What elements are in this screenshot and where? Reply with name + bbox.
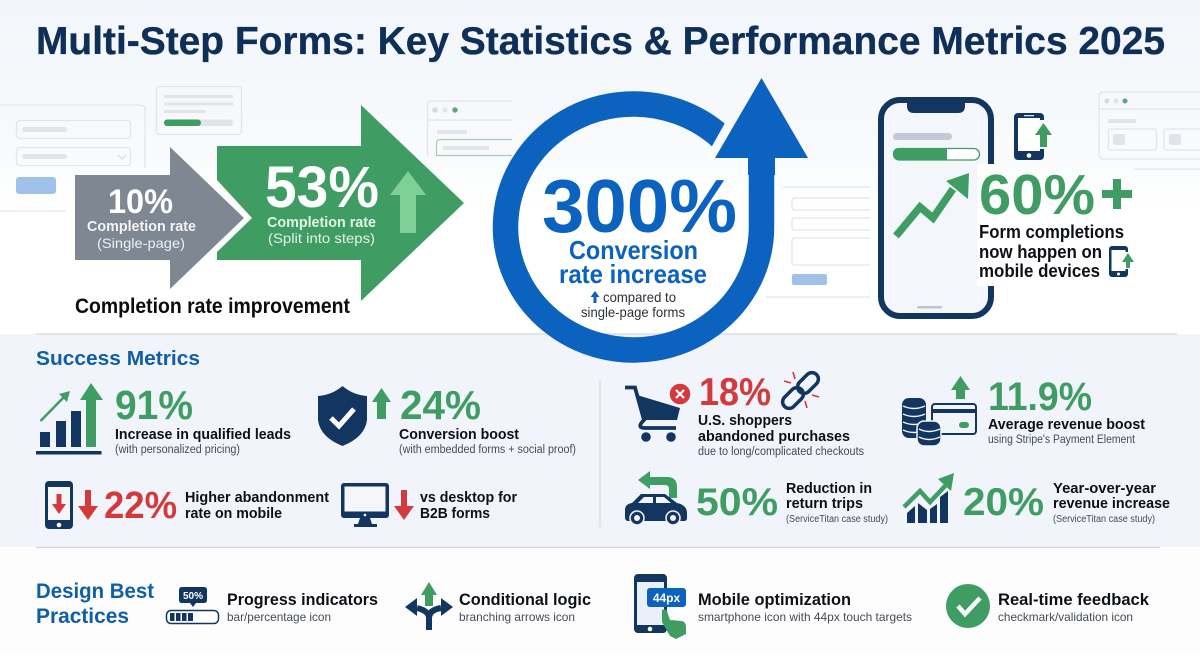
ring arrow: 300% conversion xyxy=(506,78,808,350)
metric: 22% mobile abandonment: rate on mobile xyxy=(185,505,282,522)
ghost window: middle xyxy=(428,101,512,156)
metric: 50% return trips xyxy=(625,471,888,525)
caption: completion rate improvement: Completion rate improvement xyxy=(75,295,350,318)
metric: 50% return trips: (ServiceTitan case study) xyxy=(786,514,888,525)
arrow: 10% single-page: (Single-page) xyxy=(97,235,185,251)
metric: 20% revenue increase: 20% xyxy=(963,481,1044,524)
arrow: 10% single-page: 10% xyxy=(108,183,173,221)
metric: 18% abandoned purchases: due to long/complicated checkouts xyxy=(698,446,864,458)
metric: 18% abandoned purchases: abandoned purchases xyxy=(698,428,850,445)
arrow: 53% split into steps: (Split into steps) xyxy=(268,230,375,246)
metric: 11.9% revenue boost xyxy=(902,375,1145,446)
ghost card: progress xyxy=(156,86,242,134)
practice: progress indicators: bar/percentage icon xyxy=(227,610,331,624)
stat: 60%+ mobile: now happen on xyxy=(979,242,1102,262)
metric: 20% revenue increase: Year-over-year xyxy=(1053,480,1156,497)
practice: conditional logic: branching arrows icon xyxy=(459,610,575,624)
stat: 60%+ mobile: 60% xyxy=(979,163,1095,227)
title: Multi-Step Forms: Key Statistics & Performance Metrics 2025 xyxy=(36,20,1165,63)
metric: 24% conversion boost xyxy=(318,382,576,456)
heading: design best practices xyxy=(36,580,154,628)
metric: 24% conversion boost: Conversion boost xyxy=(399,426,519,443)
arrow: 53% split into steps: 53% xyxy=(265,155,379,220)
ring arrow: 300% conversion: compared to xyxy=(603,289,676,305)
metric: 91% qualified leads xyxy=(36,382,291,456)
metric: 50% return trips: Reduction in xyxy=(786,480,872,497)
stat: 60%+ mobile: Form completions xyxy=(979,222,1124,242)
practice: real-time feedback xyxy=(946,584,1150,628)
arrow: 53% split into steps xyxy=(217,105,464,301)
metric: 22% mobile abandonment xyxy=(45,481,329,529)
practice: real-time feedback: checkmark/validation icon xyxy=(998,610,1133,624)
practice: mobile optimization: 44px xyxy=(653,591,680,605)
heading: design best practices: Practices xyxy=(36,605,129,628)
practice: progress indicators: 50% xyxy=(183,591,203,602)
heading: design best practices: Design Best xyxy=(36,580,154,603)
practice: mobile optimization: Mobile optimization xyxy=(698,591,851,609)
metric: 11.9% revenue boost: 11.9% xyxy=(988,375,1092,419)
practice: conditional logic xyxy=(405,582,591,630)
practice: real-time feedback: Real-time feedback xyxy=(998,591,1150,609)
practice: mobile optimization: smartphone icon with 44px touch targets xyxy=(698,610,912,624)
arrow: 10% single-page xyxy=(75,147,244,289)
metric: 11.9% revenue boost: using Stripe's Payment Element xyxy=(988,434,1136,446)
metric: 91% qualified leads: Increase in qualified leads xyxy=(115,426,291,443)
arrow: 53% split into steps: Completion rate xyxy=(267,214,376,231)
metric: 18% abandoned purchases: U.S. shoppers xyxy=(698,412,792,429)
ring arrow: 300% conversion: rate increase xyxy=(559,259,707,289)
metric: 91% qualified leads: 91% xyxy=(115,382,193,428)
metric: 91% qualified leads: (with personalized pricing) xyxy=(115,444,240,456)
practice: mobile optimization xyxy=(634,574,912,639)
metric: 22% mobile abandonment: Higher abandonment xyxy=(185,489,329,506)
ghost form: left panel xyxy=(0,105,145,211)
arrow: 10% single-page: Completion rate xyxy=(87,218,196,235)
metric: 24% conversion boost: 24% xyxy=(400,382,481,428)
metric: 20% revenue increase: (ServiceTitan case study) xyxy=(1053,514,1155,525)
ghost window: right xyxy=(1099,92,1200,169)
icon: trend arrow xyxy=(896,173,969,236)
ghost form: centre right xyxy=(766,187,870,297)
ring arrow: 300% conversion: Conversion xyxy=(569,235,698,265)
phone: progress illustration xyxy=(881,99,997,316)
stat: 60%+ mobile xyxy=(979,163,1134,281)
metric: vs desktop for B2B xyxy=(341,483,517,527)
metric: 11.9% revenue boost: Average revenue boost xyxy=(988,416,1145,433)
metric: 22% mobile abandonment: 22% xyxy=(104,485,177,527)
practice: progress indicators xyxy=(166,587,378,624)
metric: vs desktop for B2B: vs desktop for xyxy=(420,489,517,506)
metric: 20% revenue increase xyxy=(904,473,1170,525)
heading: success metrics: Success Metrics xyxy=(36,348,200,370)
ring arrow: 300% conversion: 300% xyxy=(542,164,737,248)
metric: vs desktop for B2B: B2B forms xyxy=(420,505,490,522)
metric: 20% revenue increase: revenue increase xyxy=(1053,495,1170,512)
icon: small phone with up arrow xyxy=(1014,113,1052,160)
stat: 60%+ mobile: mobile devices xyxy=(979,261,1100,281)
practice: progress indicators: Progress indicators xyxy=(227,591,378,609)
metric: 24% conversion boost: (with embedded forms + social proof) xyxy=(399,444,576,456)
metric: 18% abandoned purchases xyxy=(625,370,864,458)
metric: 18% abandoned purchases: 18% xyxy=(699,371,771,414)
metric: 50% return trips: return trips xyxy=(786,495,863,512)
ring arrow: 300% conversion: single-page forms xyxy=(581,304,685,320)
metric: 50% return trips: 50% xyxy=(696,481,778,524)
practice: conditional logic: Conditional logic xyxy=(459,591,591,609)
